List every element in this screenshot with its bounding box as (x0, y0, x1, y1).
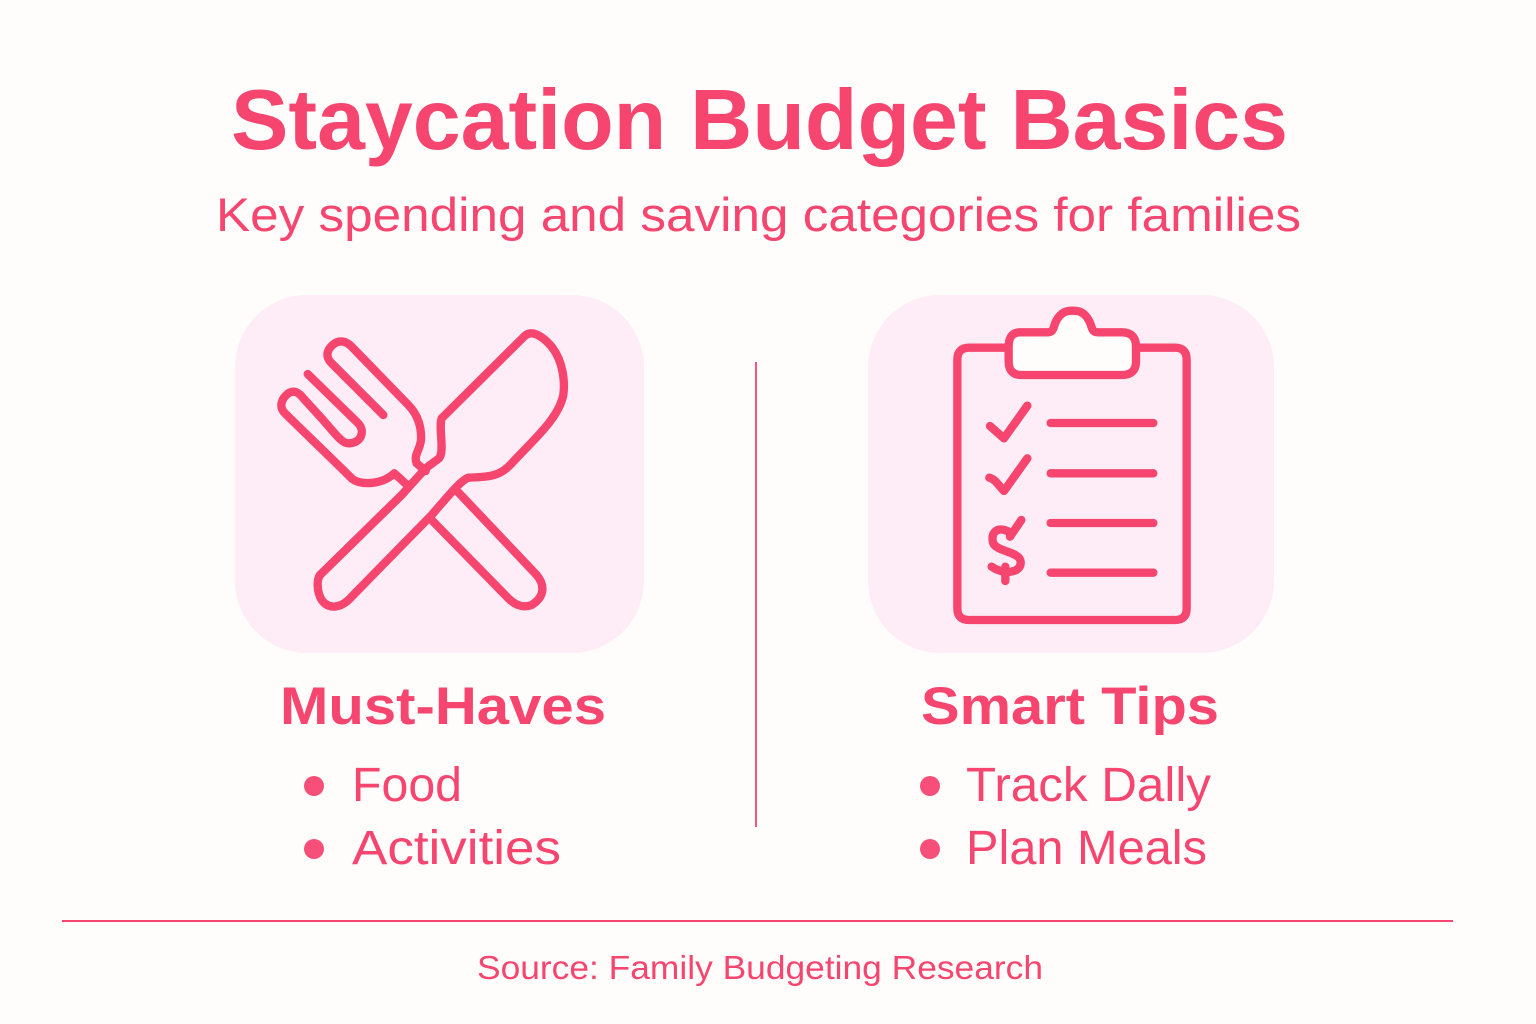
list: must-haves: Activities (352, 822, 561, 875)
icon: clipboard checklist (957, 311, 1187, 620)
icon: crossed fork and knife (281, 333, 564, 607)
panel: smart tips icon tile (868, 295, 1274, 653)
list: smart tips: Track Dally (966, 759, 1211, 812)
source note: Source: Family Budgeting Research (477, 949, 1043, 986)
list: smart tips: Plan Meals (966, 822, 1207, 875)
list: must-haves: Food (352, 759, 462, 812)
heading: must-haves: Must-Haves (280, 677, 606, 736)
subtitle: Key spending and saving categories for families (216, 188, 1301, 241)
panel: must-haves icon tile (235, 295, 644, 653)
list: must-haves (304, 759, 561, 875)
list: smart tips (920, 759, 1211, 875)
title: Staycation Budget Basics (231, 73, 1288, 168)
heading: smart tips: Smart Tips (921, 677, 1219, 736)
